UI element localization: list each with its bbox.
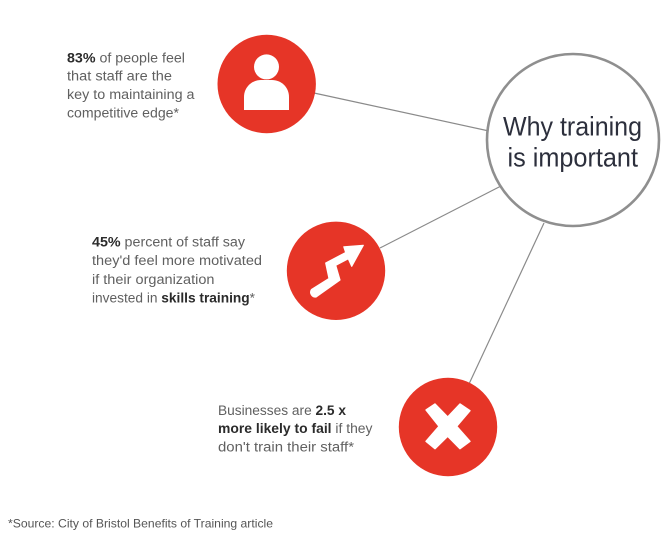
text: 45% statistic: invested in skills training* xyxy=(92,291,256,306)
hub title xyxy=(503,112,642,172)
text: 45% statistic: if their organization xyxy=(92,272,214,287)
icon: cross xyxy=(399,378,497,476)
text: 83% statistic: 83% of people feel xyxy=(67,51,185,66)
icon: rising arrow xyxy=(287,222,385,320)
connector: person to hub xyxy=(314,93,489,131)
text: 2.5x statistic: don't train their staff* xyxy=(218,440,355,455)
hub title: is important xyxy=(508,142,638,172)
text: 83% statistic: key to maintaining a xyxy=(67,87,195,102)
text: 45% statistic: they'd feel more motivated xyxy=(92,253,262,268)
text: 45% statistic: 45% percent of staff say xyxy=(92,235,245,250)
text: 83% statistic xyxy=(67,51,195,121)
text: 83% statistic: competitive edge* xyxy=(67,106,180,120)
hub: why training is important xyxy=(487,54,659,226)
connector: cross to hub xyxy=(469,223,544,384)
text: 2.5x statistic: more likely to fail if they xyxy=(218,421,373,436)
text: 2.5x statistic xyxy=(218,403,373,455)
connector: arrow to hub xyxy=(380,186,501,248)
icon: person xyxy=(218,35,316,133)
text: 83% statistic: that staff are the xyxy=(67,69,172,84)
text: 45% statistic xyxy=(92,235,262,306)
source note: *Source: City of Bristol Benefits of Training article xyxy=(8,516,273,530)
text: 2.5x statistic: Businesses are 2.5 x xyxy=(218,403,346,418)
hub title: Why training xyxy=(503,112,642,142)
